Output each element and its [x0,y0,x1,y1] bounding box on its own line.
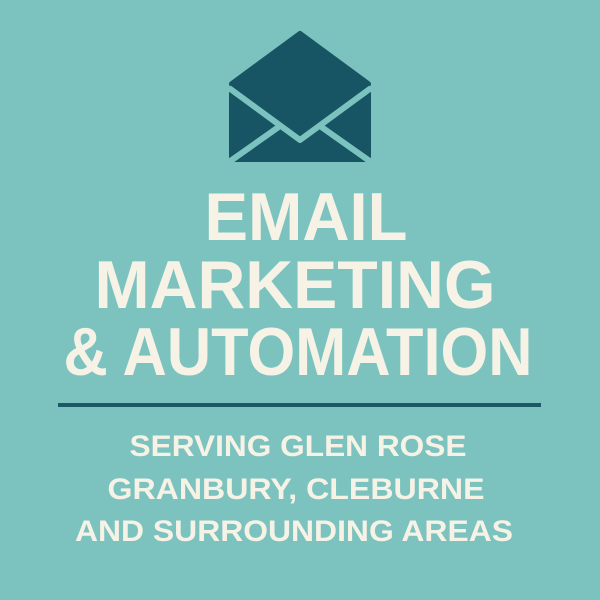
title: & AUTOMATION [64,314,532,390]
subtitle: SERVING GLEN ROSE [130,430,466,463]
title: EMAIL [204,179,408,255]
title: MARKETING [94,247,496,323]
subtitle [75,430,513,548]
subtitle: GRANBURY, CLEBURNE [108,473,484,506]
subtitle: AND SURROUNDING AREAS [75,515,513,548]
divider [58,403,541,407]
icon: envelope [229,34,371,162]
title [64,179,532,390]
